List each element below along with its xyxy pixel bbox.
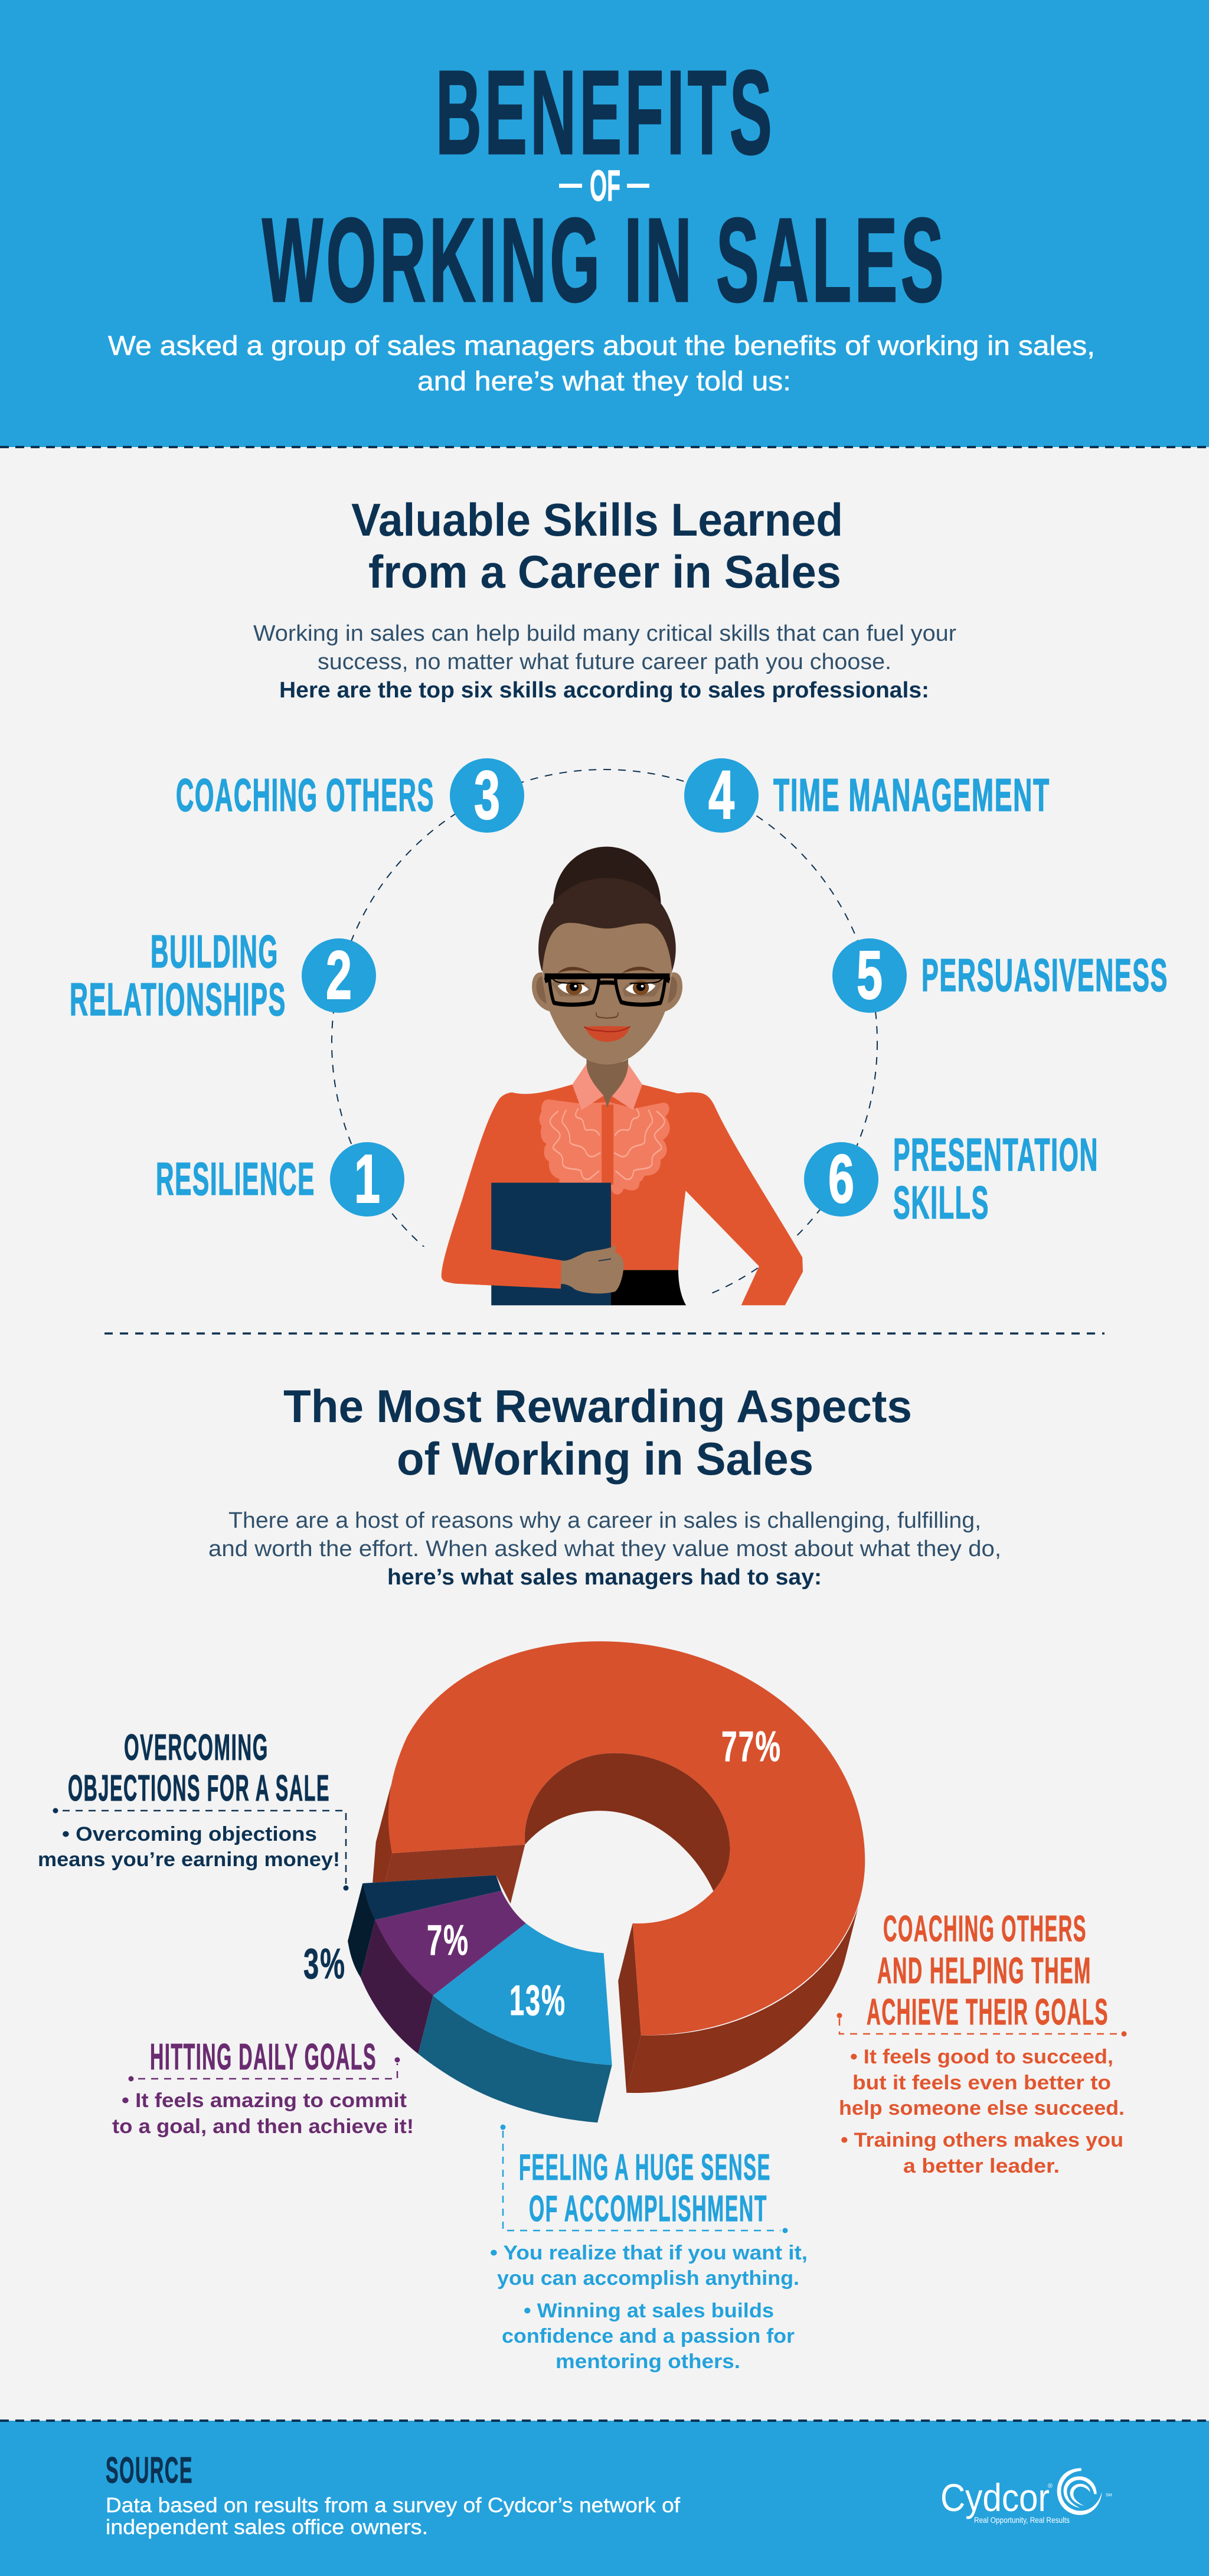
chart: 3D exploded donut — [348, 1641, 865, 2122]
hand — [561, 1245, 624, 1293]
source text — [106, 2494, 680, 2539]
text block: skills intro: Here are the top six skills according to sales professionals: — [279, 678, 929, 703]
logo: Cydcor: Real Opportunity, Real Results — [974, 2515, 1070, 2525]
text block: rewarding intro: and worth the effort. When asked what they value most about what they do, — [208, 1537, 1001, 1561]
subtitle: and here’s what they told us: — [417, 366, 791, 396]
chart values: 13% — [509, 1977, 566, 2024]
text block: rewarding intro: There are a host of reasons why a career in sales is challenging, fulfilling, — [228, 1508, 981, 1533]
callout: hitting daily goals: HITTING DAILY GOALS — [150, 2037, 377, 2078]
callout: hitting daily goals: to a goal, and then achieve it! — [112, 2115, 414, 2138]
callout: feeling accomplishment: confidence and a passion for — [502, 2325, 795, 2347]
chart values: 77% — [721, 1723, 782, 1770]
skill 1: resilience: RESILIENCE — [156, 1153, 315, 1205]
callout: overcoming objections: • Overcoming objections — [62, 1823, 317, 1845]
glasses — [545, 976, 669, 1005]
callout: feeling accomplishment: you can accomplish anything. — [497, 2267, 799, 2290]
callout: coaching others: but it feels even better to — [852, 2072, 1111, 2094]
callout: overcoming objections — [38, 1727, 348, 1891]
heading: valuable skills: Valuable Skills Learned — [351, 494, 843, 546]
divider — [104, 1332, 1105, 1335]
skill 3: coaching others: COACHING OTHERS — [176, 769, 434, 821]
skill 4: time management: 4 — [708, 757, 734, 833]
source text: Data based on results from a survey of Cydcor’s network of — [106, 2494, 680, 2517]
callout: feeling accomplishment: OF ACCOMPLISHMENT — [529, 2189, 767, 2229]
logo: Cydcor: Cydcor — [940, 2476, 1050, 2519]
panel: footer — [0, 2421, 1209, 2576]
slice: 13% blue — [418, 1995, 612, 2122]
title — [262, 45, 947, 327]
slice: 77% orange — [388, 1641, 865, 2035]
skill 1: resilience: 1 — [354, 1140, 380, 1217]
heading: rewarding aspects: The Most Rewarding Aspects — [283, 1380, 912, 1432]
skill 3: coaching others — [176, 757, 524, 833]
slice: 3% navy — [348, 1883, 375, 1978]
logo: Cydcor: SM — [1106, 2493, 1112, 2497]
skill 6: presentation skills: SKILLS — [893, 1176, 989, 1228]
skill 2: building relationships: BUILDING — [151, 925, 279, 977]
callout: coaching others: help someone else succeed. — [839, 2097, 1125, 2120]
callout: overcoming objections: means you’re earning money! — [38, 1848, 340, 1871]
heading: valuable skills: from a Career in Sales — [368, 546, 841, 598]
slice: 7% purple — [361, 1920, 433, 2054]
callout: feeling accomplishment: FEELING A HUGE SENSE — [519, 2147, 771, 2188]
folder — [491, 1183, 611, 1305]
subtitle: We asked a group of sales managers about the benefits of working in sales, — [108, 330, 1095, 361]
logo: Cydcor: ® — [1048, 2483, 1053, 2490]
chart values: 7% — [427, 1917, 469, 1964]
source text: independent sales office owners. — [106, 2516, 428, 2539]
callout: coaching others: • It feels good to succeed, — [850, 2046, 1113, 2068]
illustration: businesswoman — [442, 847, 803, 1305]
callout: overcoming objections: OBJECTIONS FOR A SALE — [68, 1768, 330, 1809]
callout: coaching others: a better leader. — [903, 2155, 1060, 2177]
heading: rewarding aspects — [283, 1380, 912, 1485]
chart values — [303, 1723, 782, 2024]
text block: skills intro — [253, 621, 956, 703]
chart values: 3% — [303, 1941, 346, 1988]
callout: coaching others: • Training others makes you — [841, 2129, 1123, 2151]
slice wall: orange cut — [385, 1845, 525, 1903]
slice wall: orange hole — [525, 1753, 730, 1891]
logo: Cydcor — [940, 2468, 1112, 2525]
skill 2: building relationships: RELATIONSHIPS — [70, 973, 286, 1025]
panel: header — [0, 0, 1209, 447]
skill 5: persuasiveness: 5 — [857, 937, 883, 1013]
title: BENEFITS — [436, 45, 775, 179]
text block: skills intro: success, no matter what future career path you choose. — [318, 650, 891, 674]
subtitle — [108, 330, 1095, 396]
heading: rewarding aspects: of Working in Sales — [397, 1433, 813, 1485]
skill 2: building relationships: 2 — [326, 937, 352, 1013]
dashed ring — [332, 769, 877, 1315]
title: OF — [590, 161, 620, 210]
text block: skills intro: Working in sales can help build many critical skills that can fuel your — [253, 621, 956, 646]
callout: feeling accomplishment: • You realize that if you want it, — [490, 2242, 808, 2264]
slice wall: outer left orange — [372, 1784, 392, 1883]
text block: rewarding intro: here’s what sales managers had to say: — [387, 1565, 822, 1590]
skill 1: resilience — [156, 1140, 404, 1217]
forearm — [444, 1248, 562, 1289]
source heading: SOURCE — [106, 2450, 193, 2491]
skill 6: presentation skills — [804, 1129, 1099, 1228]
skill 6: presentation skills: 6 — [828, 1140, 854, 1217]
callout: feeling accomplishment: mentoring others. — [556, 2350, 740, 2373]
skill 4: time management — [684, 757, 1050, 833]
skill 5: persuasiveness — [832, 937, 1168, 1013]
heading: valuable skills — [351, 494, 843, 598]
callout: overcoming objections: OVERCOMING — [124, 1727, 269, 1768]
skill 2: building relationships — [70, 925, 376, 1025]
blouse — [442, 1084, 803, 1305]
callout: hitting daily goals — [112, 2037, 414, 2138]
skill 3: coaching others: 3 — [474, 757, 500, 833]
callout: coaching others — [837, 1909, 1126, 2177]
callout: feeling accomplishment — [490, 2125, 808, 2373]
callout: feeling accomplishment: • Winning at sales builds — [524, 2300, 774, 2322]
slice wall: orange outer right — [626, 1906, 858, 2093]
text block: rewarding intro — [208, 1508, 1001, 1590]
callout: hitting daily goals: • It feels amazing to commit — [122, 2089, 407, 2112]
